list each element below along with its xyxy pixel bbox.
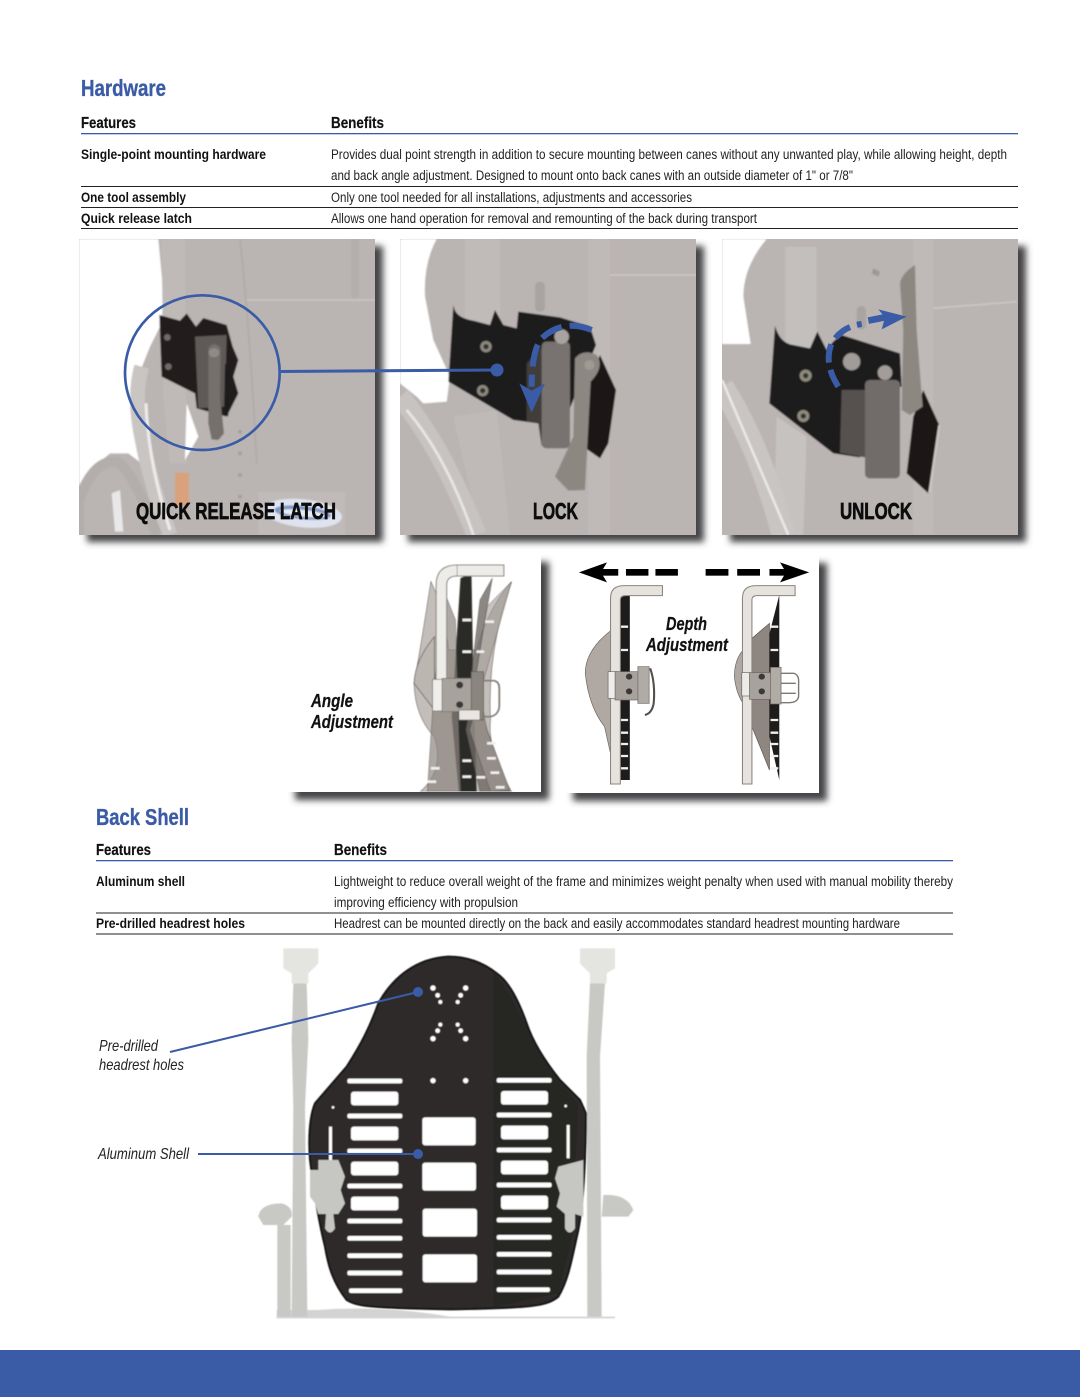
table: back shell features and benefits: Headrest can be mounted directly on the back and easily accommodates standard headrest mounting hardware — [334, 916, 900, 931]
photo panel: unlock — [722, 239, 1026, 542]
table: hardware features and benefits: Benefits — [331, 115, 384, 132]
photo label: unlock: UNLOCK — [840, 498, 912, 524]
table: hardware features and benefits: Features — [81, 115, 136, 132]
callout: aluminum shell — [97, 1146, 423, 1163]
shell plate — [309, 957, 586, 1309]
callout line from circle to latch — [281, 364, 504, 376]
frame posts behind shell — [258, 948, 633, 1318]
table: hardware features and benefits: Quick release latch — [81, 211, 192, 226]
heading: Hardware: Hardware — [81, 75, 166, 101]
label: angle adjustment — [310, 691, 394, 732]
photo label: quick release latch: QUICK RELEASE LATCH — [136, 498, 336, 524]
arrow: left and right depth movement — [579, 562, 809, 582]
heading: Back Shell: Back Shell — [96, 804, 189, 830]
table: hardware features and benefits: and back angle adjustment. Designed to mount onto back canes with an outside diameter of 1" or 7/8" — [331, 168, 853, 183]
table: back shell features and benefits: Benefits — [334, 842, 387, 859]
table: back shell features and benefits: Lightweight to reduce overall weight of the frame and minimizes weight penalty when used with manual mobility thereby — [334, 874, 953, 889]
label: angle adjustment: Angle — [310, 691, 353, 711]
table: back shell features and benefits — [96, 842, 953, 934]
table: back shell features and benefits: Pre-drilled headrest holes — [96, 916, 245, 931]
label: depth adjustment — [645, 614, 729, 655]
callout: pre-drilled headrest holes — [99, 987, 423, 1074]
label: depth adjustment: Adjustment — [645, 635, 729, 655]
table: hardware features and benefits: Only one tool needed for all installations, adjustments and accessories — [331, 190, 692, 205]
table: back shell features and benefits: improving efficiency with propulsion — [334, 895, 518, 910]
label: angle adjustment: Adjustment — [310, 712, 394, 732]
footer band — [0, 1350, 1080, 1397]
table: hardware features and benefits: One tool assembly — [81, 190, 186, 205]
photo panel: lock — [400, 239, 704, 542]
photo panel: quick release latch — [79, 239, 383, 542]
callout: aluminum shell: Aluminum Shell — [97, 1146, 189, 1163]
diagram panel: angle adjustment — [287, 555, 549, 800]
table: hardware features and benefits: Single-point mounting hardware — [81, 147, 266, 162]
label: depth adjustment: Depth — [666, 614, 707, 634]
table: hardware features and benefits: Allows one hand operation for removal and remounting of the back during transport — [331, 211, 757, 226]
table: hardware features and benefits — [81, 115, 1018, 229]
table: back shell features and benefits: Aluminum shell — [96, 874, 185, 889]
photo label: lock: LOCK — [533, 498, 578, 524]
diagram panel: depth adjustment — [565, 556, 827, 801]
table: back shell features and benefits: Features — [96, 842, 151, 859]
illustration: aluminum back shell on frame — [258, 948, 633, 1318]
callout: pre-drilled headrest holes: headrest holes — [99, 1057, 184, 1074]
callout: pre-drilled headrest holes: Pre-drilled — [99, 1038, 159, 1055]
mounting brackets — [310, 1160, 583, 1232]
